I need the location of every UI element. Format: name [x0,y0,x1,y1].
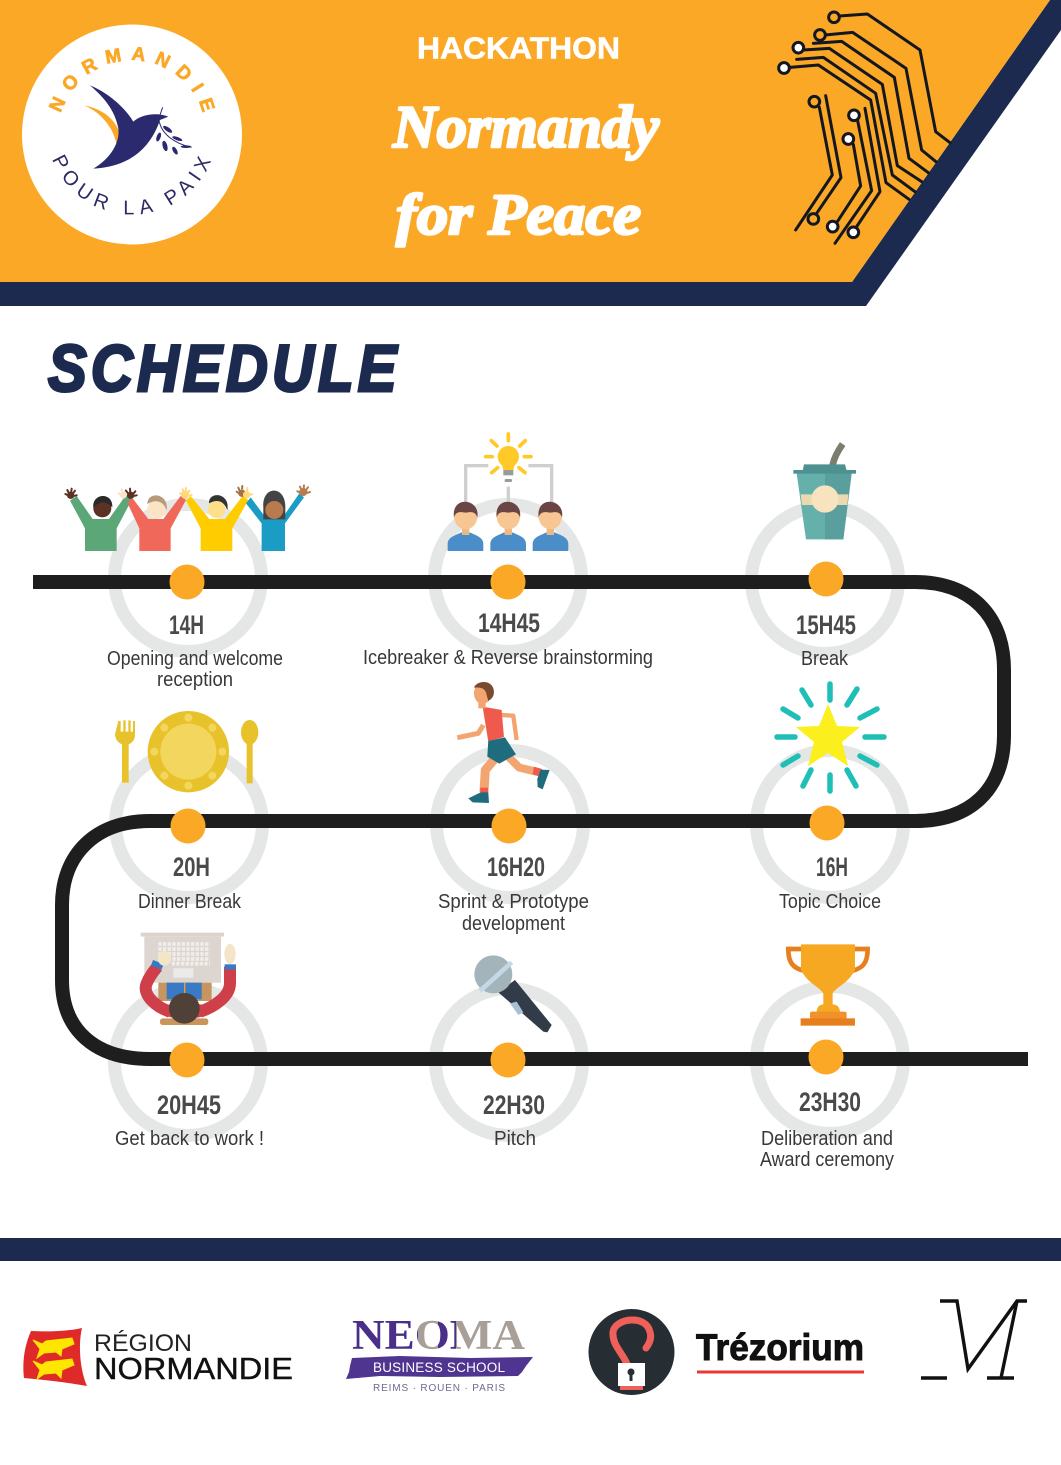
timeline track [33,582,1028,1059]
step 4: 16H: Topic Choice [779,890,881,913]
step 1: 14H: reception [157,668,233,691]
timeline rings [114,504,904,1136]
step 8: 22H30: 22H30 [483,1090,545,1120]
icon: brainstorming team with bulb [448,434,568,551]
step 2: 14H45: 14H45 [478,608,540,638]
step 2: 14H45: Icebreaker & Reverse brainstorming [363,646,653,669]
icon: top view laptop worker [141,933,236,1025]
step 4: 16H [779,852,881,913]
step 5: 16H20 [438,852,589,935]
heading: for Peace: for Peace [396,182,641,247]
logo: Trézorium: Trézorium [696,1327,864,1368]
logo: NEOMA Business School: REIMS · ROUEN · PARIS [373,1383,505,1394]
logo: Normandie pour la paix: POUR LA PAIX [52,154,211,214]
logo: Normandie pour la paix [22,24,242,244]
step 5: 16H20: 16H20 [487,852,545,882]
step 4: 16H: 16H [816,852,848,882]
heading: hackathon: HACKATHON [417,30,620,66]
title: schedule: SCHEDULE [48,333,398,406]
step 1: 14H: Opening and welcome [107,647,283,670]
step 7: 20H45 [115,1090,264,1150]
step 2: 14H45 [363,608,653,669]
step 1: 14H: 14H [169,610,204,640]
icon: star with rays [777,684,884,791]
logo: NEOMA Business School: BUSINESS SCHOOL [373,1360,505,1375]
step 9: 23H30 [760,1087,895,1171]
step 1: 14H [107,610,283,691]
step 6: 20H: 20H [173,852,210,882]
logo: M monogram [921,1301,1027,1378]
logo: Région Normandie: RÉGION [94,1330,192,1357]
header banner [0,0,1061,306]
logo: Région Normandie [23,1328,293,1386]
heading: Normandy: Normandy [392,94,659,160]
step 6: 20H [138,852,242,913]
icon: circuit traces [779,12,950,243]
timeline dots [170,562,844,1078]
step 5: 16H20: Sprint & Prototype [438,890,589,913]
logo: NEOMA Business School: NEOMA [352,1313,526,1359]
step 3: 15H45: Break [801,647,849,670]
icon: microphone [474,955,552,1032]
icon: plate and cutlery [115,711,258,792]
step 9: 23H30: Deliberation and [761,1127,893,1150]
step 8: 22H30: Pitch [494,1127,536,1150]
step 3: 15H45 [796,610,856,670]
icon: takeaway cup [793,444,856,539]
step 7: 20H45: Get back to work ! [115,1127,264,1150]
step 6: 20H: Dinner Break [138,890,242,913]
icon: runner [457,682,550,803]
logo: Région Normandie: NORMANDIE [94,1351,293,1386]
step 5: 16H20: development [462,912,565,935]
step 7: 20H45: 20H45 [157,1090,221,1120]
step 8: 22H30 [483,1090,545,1150]
logo: NEOMA Business School [346,1313,533,1394]
icon: four people cheering [65,485,310,551]
logo: Trézorium [588,1309,864,1395]
step 3: 15H45: 15H45 [796,610,856,640]
logo: Normandie pour la paix: NORMANDIE [48,46,216,112]
icon: trophy [788,944,868,1026]
footer band [0,1238,1061,1261]
step 9: 23H30: Award ceremony [760,1148,895,1171]
step 9: 23H30: 23H30 [799,1087,861,1117]
